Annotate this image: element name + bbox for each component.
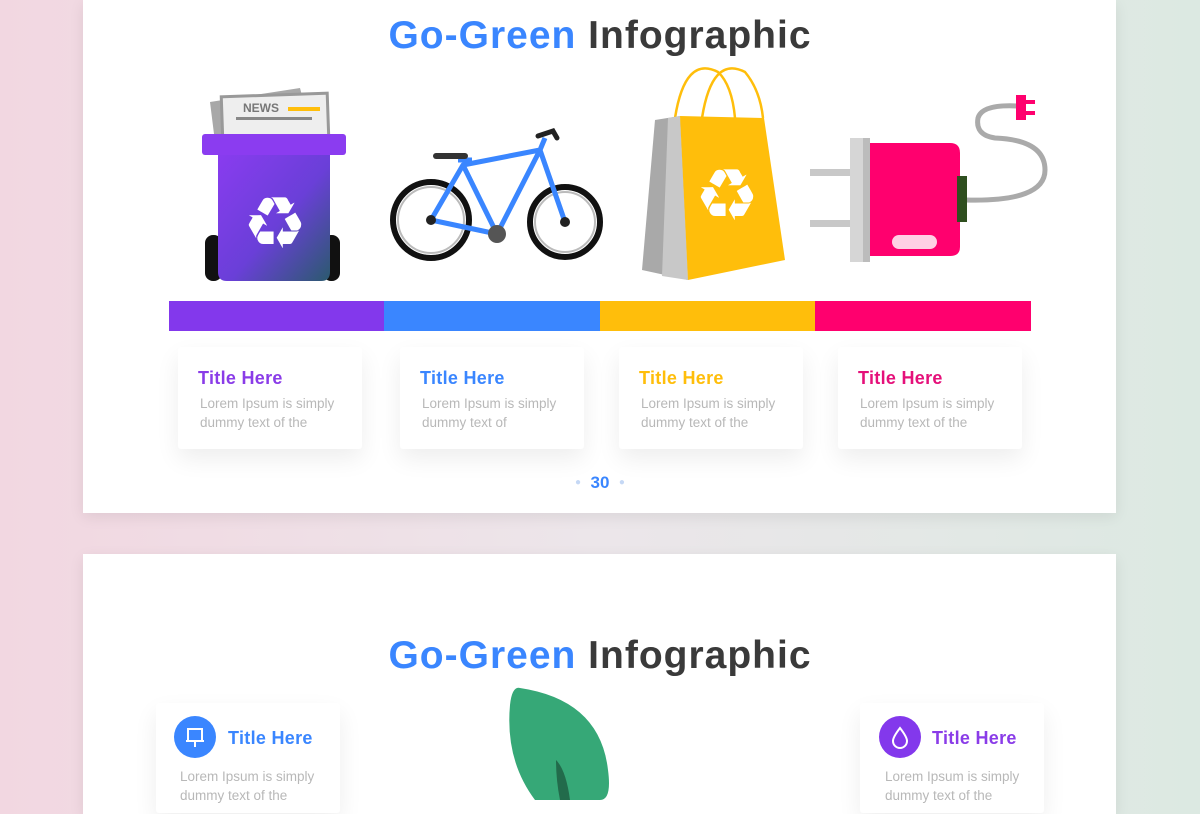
card left [156, 703, 340, 813]
card 2 [400, 347, 584, 449]
icon: recycle bin [202, 88, 346, 281]
slide 1 [83, 0, 1116, 513]
card right: Lorem Ipsum is simply dummy text of the [885, 769, 1019, 803]
card 1: Title Here [198, 368, 283, 388]
icon: bicycle [393, 131, 600, 258]
title 2: Go-Green Infographic [388, 634, 812, 677]
card 3: Title Here [639, 368, 724, 388]
card 4 [838, 347, 1022, 449]
icon: shopping bag [642, 68, 785, 280]
card 2: Lorem Ipsum is simply dummy text of [422, 396, 556, 430]
card left: Lorem Ipsum is simply dummy text of the [180, 769, 314, 803]
icon: recycle bin: ♻ [243, 181, 307, 265]
icon: charger plug [810, 95, 1045, 262]
slide 2 [83, 554, 1116, 814]
icon: shopping bag: ♻ [695, 153, 759, 237]
card 4: Title Here [858, 368, 943, 388]
card left: Title Here [228, 728, 313, 748]
card 2: Title Here [420, 368, 505, 388]
card 1 [178, 347, 362, 449]
card right [860, 703, 1044, 813]
card 3: Lorem Ipsum is simply dummy text of the [641, 396, 775, 430]
page number: ● 30 ● [575, 473, 625, 492]
icon: leaf [509, 688, 609, 800]
card 3 [619, 347, 803, 449]
color bar [169, 301, 1031, 331]
card right: Title Here [932, 728, 1017, 748]
card 1: Lorem Ipsum is simply dummy text of the [200, 396, 334, 430]
card 4: Lorem Ipsum is simply dummy text of the [860, 396, 994, 430]
title 1: Go-Green Infographic [388, 14, 812, 57]
icon: drop [879, 716, 921, 758]
icon: recycle bin: NEWS [243, 101, 279, 115]
icon: board [174, 716, 216, 758]
